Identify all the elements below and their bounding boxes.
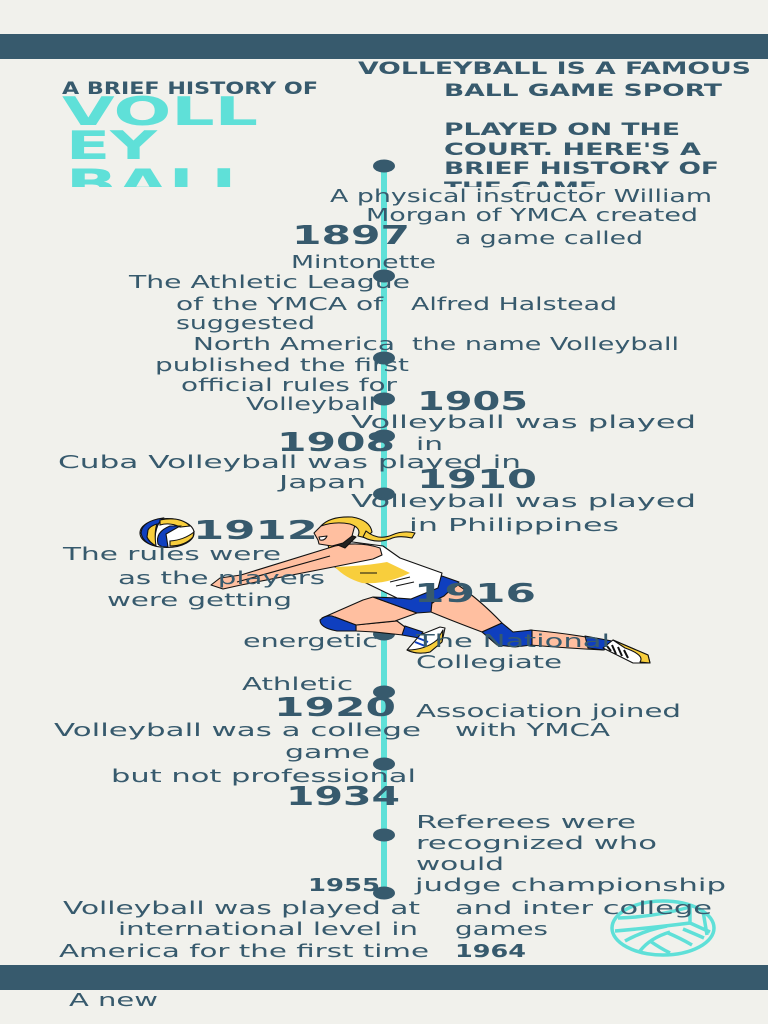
entry: 1908: 1908 (277, 428, 395, 458)
entry: 1955: 1955 (308, 875, 380, 896)
collar (333, 535, 356, 548)
braid (363, 531, 415, 541)
title main word: VOLL (62, 90, 258, 135)
entry: Athletic League (127, 272, 410, 415)
entry: 1934 (286, 782, 726, 940)
intro text: PLAYED ON THE (444, 120, 680, 140)
front sock (402, 626, 423, 638)
back shoe (603, 640, 650, 663)
title kicker: A BRIEF HISTORY OF (62, 79, 318, 99)
entry: 1955: Volleyball was played at (63, 898, 420, 919)
title (62, 82, 316, 187)
shorts (373, 576, 459, 613)
shoulder strap (328, 543, 336, 553)
jersey stripe (335, 562, 410, 583)
entry: 1910: Volleyball was played (351, 491, 696, 512)
front thigh (322, 597, 417, 625)
back thigh (431, 585, 502, 632)
entry: 1912: were getting (107, 590, 292, 611)
entry: 1920: Volleyball was a college (54, 720, 421, 741)
entry: 1897: Mintonette (291, 252, 436, 273)
entry: 1912: as the players (118, 568, 325, 589)
entry: 1908 (58, 428, 521, 493)
entry: 1920 (54, 693, 421, 787)
hair (321, 517, 372, 538)
entry: 1920: game (285, 742, 370, 763)
entry: 1908: Cuba Volleyball was played in (58, 452, 521, 473)
entry: 1910 (351, 465, 696, 536)
face (314, 520, 355, 546)
entry: 1934: judge championship (413, 875, 726, 896)
entry: 1905: 1905 (417, 387, 528, 417)
entry: 1905: Volleyball was played (351, 412, 696, 433)
intro text: VOLLEYBALL IS A FAMOUS (358, 59, 751, 79)
entry: 1910: in Philippines (409, 515, 619, 536)
entry: 1912: energetic (243, 631, 378, 652)
front shoe sole (407, 630, 443, 653)
bottom banner (0, 965, 768, 990)
front shoe (407, 627, 445, 653)
entry: Alfred Halstead: the name Volleyball (412, 334, 679, 355)
entry: 1934: recognized who (416, 833, 657, 854)
front calf (356, 621, 405, 635)
entry: 1912: The rules were (61, 544, 281, 565)
entry: 1920: 1920 (274, 693, 396, 723)
entry: 1916: with YMCA (455, 720, 611, 741)
title main word (62, 96, 256, 187)
smile (319, 536, 327, 540)
top banner (0, 34, 768, 59)
back knee pad (482, 623, 532, 647)
entry: Athletic League: published the first (155, 355, 409, 376)
back shoe stripes (607, 645, 628, 658)
timeline (373, 160, 395, 900)
entry: 1934: would (416, 854, 504, 875)
entry: 1912: 1912 (193, 516, 318, 546)
entry: 1964: 1964 (455, 941, 526, 962)
entry: Athletic League: of the YMCA of (176, 294, 384, 315)
entry: 1916: Athletic (242, 674, 353, 695)
entry: 1905 (351, 387, 696, 455)
entry: 1955 (59, 875, 429, 962)
entry: 1897: a game called (455, 228, 643, 249)
intro text: THE GAME (444, 179, 597, 199)
arms (211, 544, 382, 589)
jersey marks (360, 573, 414, 586)
back calf (530, 630, 613, 650)
entry: Athletic League: The Athletic League (127, 272, 410, 293)
entry: 1910: 1910 (417, 465, 537, 495)
entry: 1897: 1897 (292, 221, 410, 251)
entry: 1897 (291, 186, 712, 273)
icon: volleyball, coloured (140, 518, 194, 548)
entry: 1897: Morgan of YMCA created (366, 205, 698, 226)
entry: 1916: 1916 (414, 579, 536, 609)
back shoe trim (613, 640, 650, 663)
entry: Athletic League: North America (193, 334, 395, 355)
lower arm line (237, 556, 330, 582)
entry: Athletic League: official rules for (181, 375, 398, 396)
footer text: A new (69, 990, 158, 1011)
jersey (330, 541, 442, 599)
entry: Athletic League: Volleyball (246, 394, 376, 415)
entry: 1916 (242, 579, 681, 741)
entry: Alfred Halstead (411, 294, 679, 355)
entry: Athletic League: suggested (176, 313, 315, 334)
title main word: BALL (66, 162, 254, 207)
entry: 1897: A physical instructor William (330, 186, 712, 207)
entry: 1916: Association joined (416, 701, 681, 722)
entry: 1934: 1934 (286, 782, 400, 812)
entry: 1912 (61, 516, 378, 652)
entry: 1934: games (455, 919, 548, 940)
entry: 1916: The National (414, 631, 610, 652)
front shoe stripes (415, 638, 428, 646)
entry: 1916: Collegiate (416, 652, 562, 673)
intro text: BALL GAME SPORT (444, 81, 723, 101)
back sock (585, 636, 612, 650)
front knee pad (320, 616, 356, 631)
intro text: BRIEF HISTORY OF (444, 159, 719, 179)
entry: 1908: Japan (277, 472, 366, 493)
title main word: EY (66, 124, 158, 169)
entry: 1934: and inter college (455, 898, 712, 919)
entry: 1934: Referees were (416, 812, 636, 833)
entry: Alfred Halstead: Alfred Halstead (411, 294, 617, 315)
icon: volleyball player (211, 517, 650, 663)
entry: 1955: international level in (118, 919, 418, 940)
icon: volleyball, teal outline (612, 901, 714, 955)
intro text: COURT. HERE'S A (444, 140, 702, 160)
entry: 1920: but not professional (111, 766, 416, 787)
intro text (358, 62, 749, 187)
entry: 1955: America for the first time (59, 941, 429, 962)
entry: 1905: in (416, 434, 443, 455)
